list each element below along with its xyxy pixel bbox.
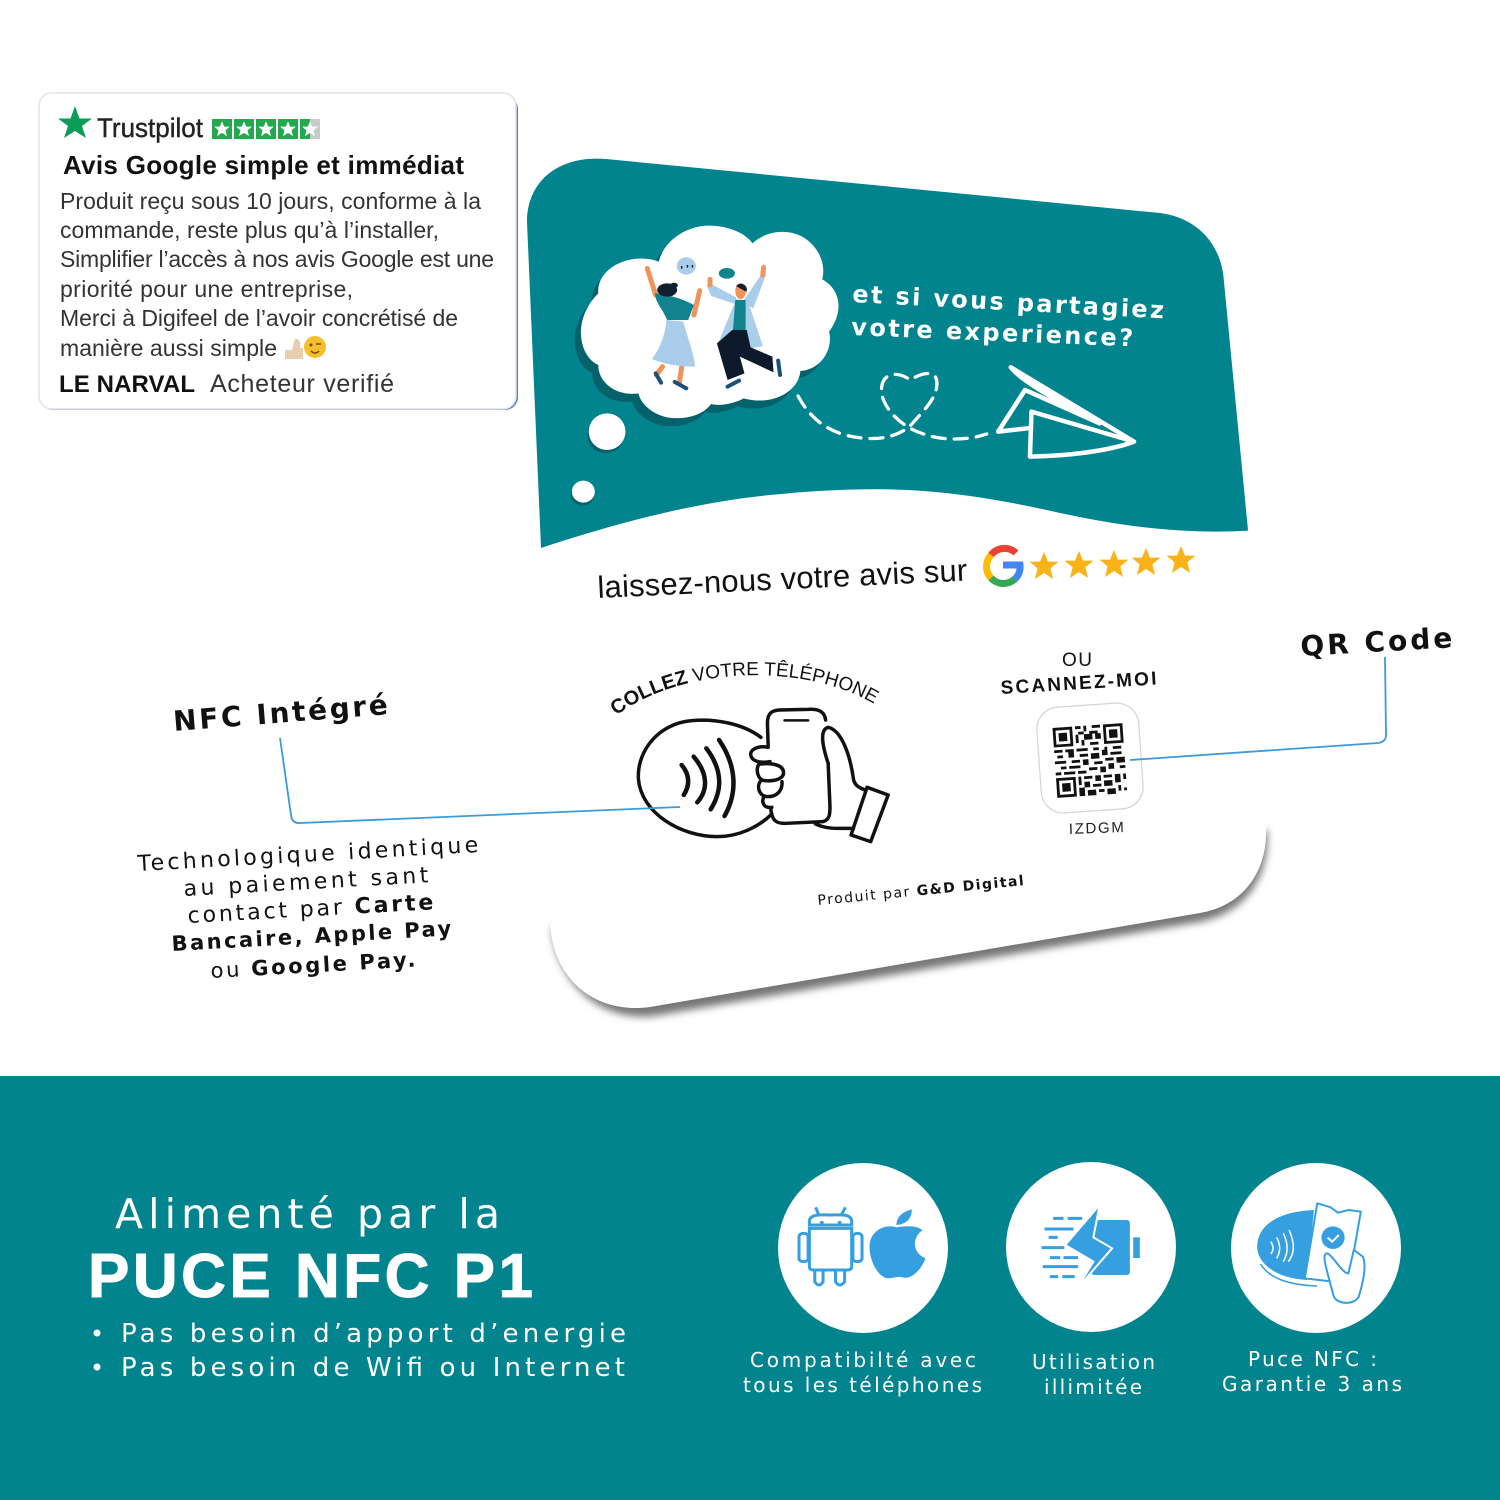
arrow: QR leader line <box>1130 657 1386 760</box>
icon: speech bubbles <box>677 257 735 279</box>
callout: NFC description: au paiement sant <box>183 863 429 902</box>
caption: compatibility: Compatibilté avec <box>750 1348 976 1372</box>
review heading: Avis Google simple et immédiat <box>63 150 464 180</box>
review author: LE NARVAL <box>59 371 195 398</box>
callout: NFC description: Bancaire, Apple Pay <box>171 916 452 956</box>
illustration: dancing man <box>707 267 780 387</box>
icon: paper plane <box>998 367 1134 457</box>
panel: teal footer band <box>0 1076 1500 1500</box>
review body: manière aussi simple <box>60 335 277 361</box>
caption: unlimited use: Utilisation <box>1032 1350 1155 1374</box>
icon: NFC hand with phone <box>638 709 888 842</box>
footer bullets: Pas besoin de Wifi ou Internet <box>121 1353 625 1383</box>
panel: review card <box>39 93 518 410</box>
icon: trustpilot star <box>58 106 92 138</box>
credit line: Produit par G&D Digital <box>817 873 1024 909</box>
scan heading: SCANNEZ-MOI <box>1000 669 1157 699</box>
footer heading: Alimenté par la <box>115 1190 500 1238</box>
card shadow <box>552 830 1267 1017</box>
callout: NFC description: contact par Carte <box>187 890 434 929</box>
icon: battery bolt <box>1042 1205 1140 1290</box>
icon: NFC phone check <box>1257 1203 1365 1303</box>
QR frame <box>1035 702 1145 814</box>
icon: google G <box>987 548 1020 583</box>
QR code identifier: IZDGM <box>1069 819 1124 838</box>
illustration: dancing woman <box>647 268 700 388</box>
caption: warranty: Garantie 3 ans <box>1222 1372 1402 1396</box>
caption: warranty <box>1222 1347 1402 1396</box>
review body <box>60 188 494 361</box>
caption: unlimited use: illimitée <box>1044 1375 1142 1399</box>
review body: commande, reste plus qu’à l’installer, <box>60 217 439 243</box>
headline on plate <box>851 280 1165 352</box>
caption: warranty: Puce NFC : <box>1248 1347 1377 1371</box>
verified buyer: Acheteur verifié <box>210 370 394 398</box>
footer title: PUCE NFC P1 <box>88 1242 533 1311</box>
trustpilot name: Trustpilot <box>97 113 203 143</box>
curved heading: collez votre téléphone: COLLEZ VOTRE TÊLÉPHONE <box>611 660 880 713</box>
callout: NFC description: ou Google Pay. <box>210 948 416 983</box>
scan heading: OU <box>1062 650 1092 671</box>
icon: android and apple <box>799 1207 925 1285</box>
caption: unlimited use <box>1032 1350 1155 1399</box>
callout: QR title: QR Code <box>1300 621 1453 663</box>
dashed flight path with heart <box>798 374 987 439</box>
caption: compatibility: tous les téléphones <box>743 1373 982 1397</box>
scan heading <box>1000 650 1157 699</box>
five gold stars <box>1030 546 1195 579</box>
feature: unlimited use <box>1006 1162 1176 1332</box>
callout: NFC title: NFC Intégré <box>172 688 389 738</box>
headline on plate: votre experience? <box>851 313 1134 352</box>
feature: compatibility <box>778 1163 948 1333</box>
QR code <box>1052 723 1127 798</box>
headline on plate: et si vous partagiez <box>852 280 1165 324</box>
callout: NFC description <box>136 833 479 983</box>
illustration: thought cloud <box>571 226 1134 506</box>
prompt: leave a review: laissez-nous votre avis sur <box>597 553 968 605</box>
feature: warranty <box>1231 1163 1401 1333</box>
review body: Produit reçu sous 10 jours, conforme à la <box>60 188 481 214</box>
review body: priorité pour une entreprise, <box>60 276 353 302</box>
icon: emoji <box>285 336 326 359</box>
footer bullets <box>94 1319 626 1383</box>
panel: NFC plate <box>527 158 1266 1008</box>
review body: Merci à Digifeel de l’avoir concrétisé de <box>60 305 458 331</box>
callout: NFC description: Technologique identique <box>136 833 479 877</box>
teal header with wave <box>527 158 1248 548</box>
review body: Simplifier l’accès à nos avis Google est une <box>60 246 494 272</box>
arrow: NFC leader line <box>280 738 680 823</box>
footer bullets: Pas besoin d’apport d’energie <box>121 1319 626 1349</box>
caption: compatibility <box>743 1348 982 1397</box>
rating stars <box>212 119 320 139</box>
